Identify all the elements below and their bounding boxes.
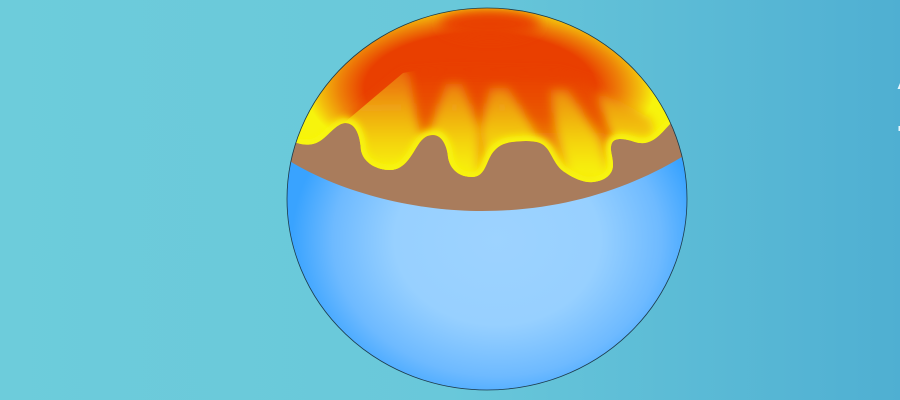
cropped white marks at right edge	[898, 83, 900, 131]
mark: lower	[898, 126, 900, 131]
top orange patch	[440, 10, 540, 38]
lava outer gradient	[296, 8, 670, 182]
lava dome	[296, 8, 670, 182]
finger: third	[480, 88, 540, 165]
water body	[287, 8, 687, 390]
mark: upper	[898, 83, 900, 89]
finger: fifth	[596, 92, 660, 145]
finger: left with sharp crease	[346, 72, 425, 170]
sphere outline	[287, 8, 687, 390]
yellow rim along drips	[297, 122, 672, 182]
finger: second	[430, 84, 480, 180]
lower lava shade	[346, 86, 617, 179]
finger: fourth	[550, 90, 610, 185]
brown crust band	[291, 123, 682, 211]
sphere	[280, 0, 700, 390]
